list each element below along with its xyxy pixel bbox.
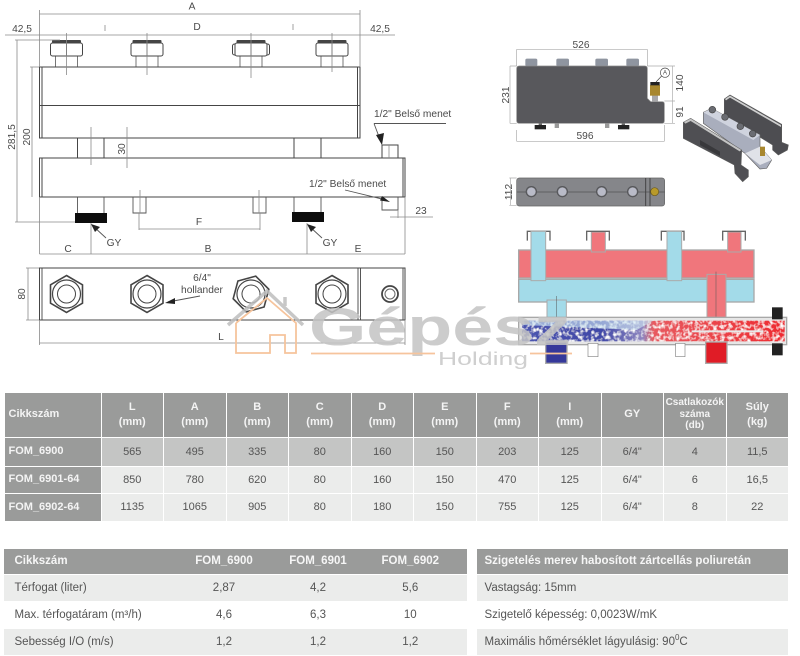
row FOM_6902-64: 150	[436, 501, 454, 513]
black side caps	[772, 307, 783, 355]
plan view dimensions	[26, 268, 405, 345]
header row: (mm)	[431, 416, 458, 428]
row FOM_6901-64: 160	[373, 474, 391, 486]
dimension labels: GY	[323, 238, 338, 249]
row FOM_6900: 80	[314, 446, 326, 458]
header row: FOM_6901	[289, 555, 347, 567]
connector caps	[527, 231, 745, 241]
dimension labels: L	[218, 332, 224, 343]
volume row: 5,6	[402, 582, 418, 594]
dimension lines	[5, 10, 433, 254]
brand name: Gépész	[309, 298, 571, 357]
row FOM_6900: 11,5	[747, 446, 768, 458]
labels of 3D side view: 231	[501, 86, 512, 104]
orange underline	[311, 352, 572, 354]
table: dimensions by product	[5, 393, 788, 521]
header row: A	[191, 400, 199, 412]
back shell	[724, 95, 788, 155]
header row: (kg)	[747, 416, 767, 428]
dimension labels: D	[193, 22, 201, 33]
dimension labels: A	[189, 2, 196, 12]
max flow row: 4,6	[216, 608, 232, 620]
upper red chamber	[519, 250, 754, 278]
insulation capacity row: Szigetelő képesség: 0,0023W/mK	[484, 608, 657, 620]
row FOM_6902-64: FOM_6902-64	[8, 500, 79, 512]
labels of 3D side view: A	[663, 70, 667, 76]
plan view	[40, 268, 405, 320]
row FOM_6900	[5, 438, 788, 466]
dimension labels: 1/2" Belső menet	[309, 179, 386, 190]
lower stubs	[78, 197, 398, 213]
table: insulation data	[477, 549, 788, 655]
header row	[4, 549, 467, 655]
front shell	[683, 118, 748, 182]
red top connectors	[591, 232, 741, 252]
A marker	[656, 68, 670, 82]
header row: Súly	[746, 400, 769, 412]
dimension labels: F	[196, 217, 202, 228]
row FOM_6901-64: 125	[561, 474, 579, 486]
row FOM_6901-64: 620	[248, 474, 266, 486]
dimension labels: 23	[415, 206, 427, 217]
table: hydraulic data	[4, 549, 467, 655]
speed row: 1,2	[310, 636, 326, 648]
dimension labels: GY	[107, 238, 122, 249]
row FOM_6902-64	[5, 494, 788, 521]
speed row	[4, 629, 467, 655]
dimension labels: hollander	[181, 285, 224, 296]
row FOM_6901-64: 780	[186, 474, 204, 486]
speed row: Sebesség I/O (m/s)	[14, 636, 114, 648]
dimension labels: 42,5	[370, 24, 390, 35]
header row: Cikkszám	[8, 408, 59, 420]
GY black connectors	[75, 212, 324, 223]
dimension labels: 1/2" Belső menet	[374, 109, 451, 120]
blue vertical tubes	[531, 231, 682, 319]
row FOM_6901-64: 16,5	[747, 474, 768, 486]
row FOM_6900: 4	[692, 446, 698, 458]
header row: I	[568, 400, 571, 412]
header row: Cikkszám	[14, 555, 68, 567]
header row: FOM_6900	[195, 555, 253, 567]
header row: (db)	[685, 420, 704, 431]
row FOM_6902-64: 180	[373, 501, 391, 513]
header row: (mm)	[556, 416, 583, 428]
labels of 3D side view: 140	[675, 74, 686, 92]
row FOM_6902-64: 1135	[120, 501, 144, 513]
red vertical tube	[707, 274, 726, 320]
row FOM_6901-64: 470	[498, 474, 516, 486]
header row: (mm)	[244, 416, 271, 428]
row FOM_6900: 125	[561, 446, 579, 458]
header row	[477, 549, 788, 655]
upper manifold	[40, 67, 360, 138]
connecting tubes	[78, 138, 398, 158]
row FOM_6901-64: 80	[314, 474, 326, 486]
header row: F	[504, 400, 511, 412]
header row: Csatlakozók	[666, 397, 724, 408]
colour flow cross-section	[519, 231, 787, 363]
row FOM_6901-64: 6	[692, 474, 698, 486]
house outline	[236, 298, 296, 353]
brass fitting	[650, 82, 660, 102]
labels of 3D side view	[501, 40, 686, 200]
dimension labels: 200	[22, 128, 33, 146]
max flow row: 6,3	[310, 608, 326, 620]
row FOM_6900: FOM_6900	[8, 445, 64, 457]
labels of 3D side view: 112	[504, 184, 515, 200]
volume row: 2,87	[213, 582, 235, 594]
dimension labels: 80	[17, 288, 28, 300]
header row: Szigetelés merev habosított zártcellás poliuretán	[484, 555, 751, 567]
header row: E	[441, 400, 448, 412]
row FOM_6900: 203	[498, 446, 516, 458]
row FOM_6902-64: 80	[314, 501, 326, 513]
dimension lines	[510, 49, 675, 141]
speed row: 1,2	[402, 636, 418, 648]
header row: száma	[679, 409, 710, 420]
row FOM_6902-64: 8	[692, 501, 698, 513]
3D side view with dimensions	[510, 49, 675, 141]
volume row: Térfogat (liter)	[14, 582, 87, 594]
header row: (mm)	[119, 416, 146, 428]
labels of 3D side view: 596	[576, 131, 594, 142]
header row	[5, 393, 788, 521]
max flow row	[14, 608, 417, 620]
dimension labels: E	[355, 244, 362, 255]
row FOM_6901-64: 6/4"	[623, 474, 642, 486]
row FOM_6900: 335	[248, 446, 266, 458]
body	[517, 66, 664, 123]
speed row: 1,2	[216, 636, 232, 648]
lower connectors	[535, 123, 629, 129]
labels of 3D side view: 526	[572, 40, 590, 51]
row FOM_6900: 6/4"	[623, 446, 642, 458]
dimension labels: B	[205, 244, 212, 255]
front elevation drawing	[5, 10, 446, 345]
header row: (mm)	[369, 416, 396, 428]
row FOM_6900: 495	[186, 446, 204, 458]
row FOM_6901-64	[5, 467, 788, 493]
volume row	[4, 575, 467, 601]
max temperature row: Maximális hőmérséklet lágyulásig: 900C	[484, 633, 688, 648]
header row: GY	[624, 408, 640, 420]
max flow row: Max. térfogatáram (m³/h)	[14, 608, 142, 620]
row FOM_6901-64: 150	[436, 474, 454, 486]
row FOM_6901-64: FOM_6901-64	[8, 473, 79, 485]
header row: L	[129, 400, 136, 412]
dimension labels	[7, 2, 451, 343]
row FOM_6900: 150	[436, 446, 454, 458]
mixing chamber	[519, 317, 787, 345]
brass fitting	[760, 147, 765, 156]
exploded isometric insulation view	[683, 95, 788, 182]
manifold nuts	[709, 106, 756, 137]
row FOM_6900: 565	[123, 446, 141, 458]
row FOM_6902-64: 125	[561, 501, 579, 513]
row FOM_6902-64: 755	[498, 501, 516, 513]
row FOM_6902-64: 905	[248, 501, 266, 513]
row FOM_6902-64: 22	[751, 501, 763, 513]
lower blue chamber	[519, 279, 754, 302]
header row: (mm)	[306, 416, 333, 428]
row FOM_6902-64: 6/4"	[623, 501, 642, 513]
row FOM_6900: 160	[373, 446, 391, 458]
row FOM_6902-64: 1065	[182, 501, 207, 513]
thickness row: Vastagság: 15mm	[484, 582, 576, 594]
nuts	[525, 59, 639, 66]
dimension labels: 30	[117, 143, 128, 155]
labels of 3D side view: 91	[675, 106, 686, 118]
volume row: 4,2	[310, 582, 326, 594]
lower blocks	[546, 342, 727, 363]
dimension labels: C	[64, 244, 72, 255]
nuts and necks	[50, 40, 348, 67]
dimension labels: 281,5	[7, 124, 18, 150]
lower manifold	[40, 158, 405, 197]
header row: C	[316, 400, 324, 412]
sub brand: Holding	[438, 349, 528, 369]
dimension labels: 6/4"	[193, 273, 211, 284]
header row: B	[253, 400, 261, 412]
small sensors	[588, 343, 685, 357]
max flow row: 10	[404, 608, 417, 620]
header row: (mm)	[181, 416, 208, 428]
row FOM_6901-64: 850	[123, 474, 141, 486]
grey roof	[228, 291, 303, 325]
header row: FOM_6902	[381, 555, 439, 567]
3D top view	[509, 178, 665, 206]
manifold	[703, 108, 772, 169]
technical drawings and product illustrations	[5, 2, 789, 369]
header row: D	[378, 400, 386, 412]
watermark logo	[228, 291, 572, 369]
leader arrows	[93, 124, 446, 302]
dimension labels: 42,5	[12, 24, 32, 35]
header row: (mm)	[494, 416, 521, 428]
